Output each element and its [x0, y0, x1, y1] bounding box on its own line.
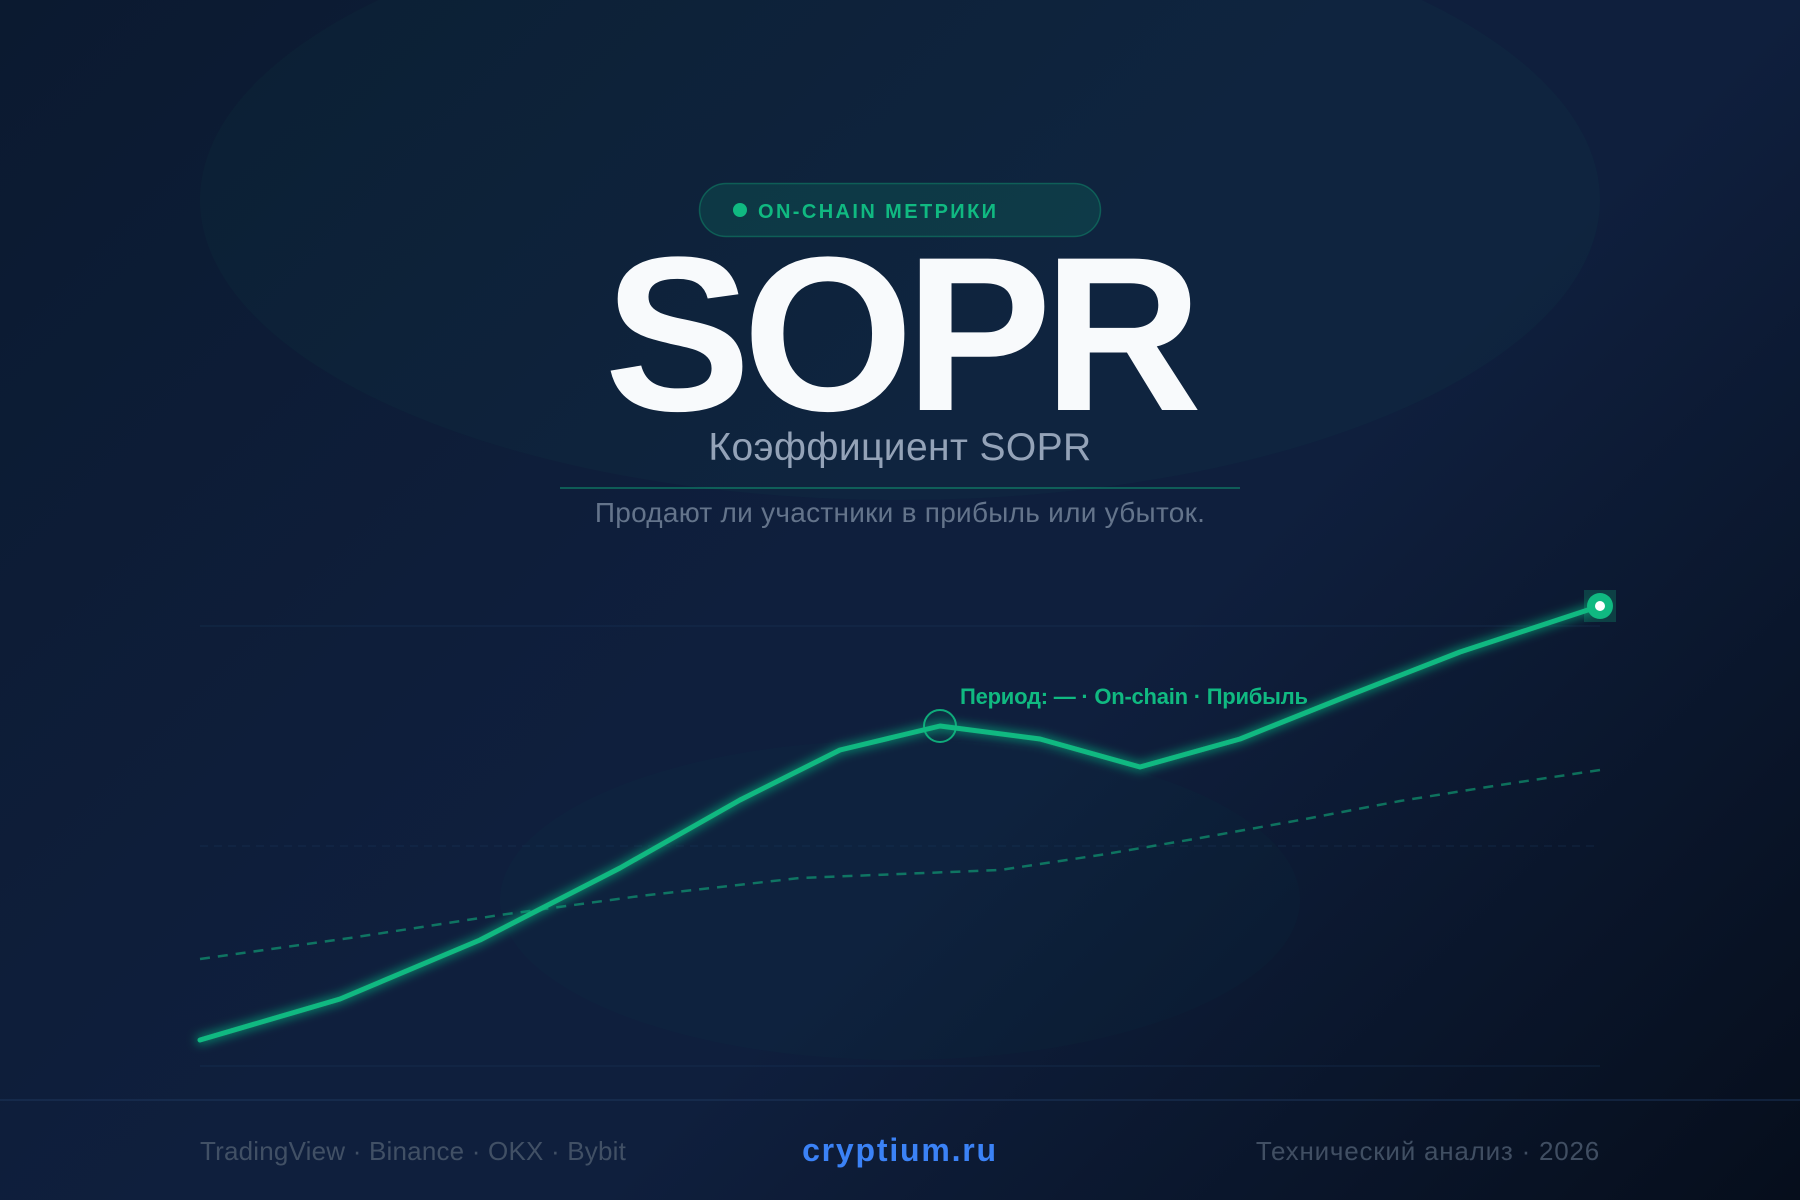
badge: on-chain metrics — [700, 184, 1100, 236]
grid lines — [200, 626, 1600, 1066]
divider — [560, 487, 1240, 489]
background glow: top ellipse — [200, 0, 1600, 500]
footer: topic: Технический анализ · 2026 — [1256, 1136, 1600, 1166]
chart label: Период: — · On-chain · Прибыль — [960, 684, 1308, 709]
footer divider — [0, 1099, 1800, 1101]
title: SOPR — [604, 211, 1198, 457]
footer: brand: cryptium.ru — [802, 1132, 998, 1168]
SOPR line glow — [200, 606, 1600, 1040]
subtitle: Коэффициент SOPR — [708, 426, 1092, 469]
dashed moving average line — [200, 770, 1600, 959]
footer: sources: TradingView · Binance · OKX · Bybit — [200, 1136, 627, 1166]
marker: end point — [1584, 590, 1616, 622]
tagline: Продают ли участники в прибыль или убыток. — [595, 497, 1205, 528]
badge: on-chain metrics: ON-CHAIN МЕТРИКИ — [758, 201, 998, 223]
SOPR line — [200, 606, 1600, 1040]
chart — [200, 590, 1616, 1066]
background glow: bottom ellipse — [500, 740, 1300, 1060]
marker: peak circle — [924, 710, 956, 742]
